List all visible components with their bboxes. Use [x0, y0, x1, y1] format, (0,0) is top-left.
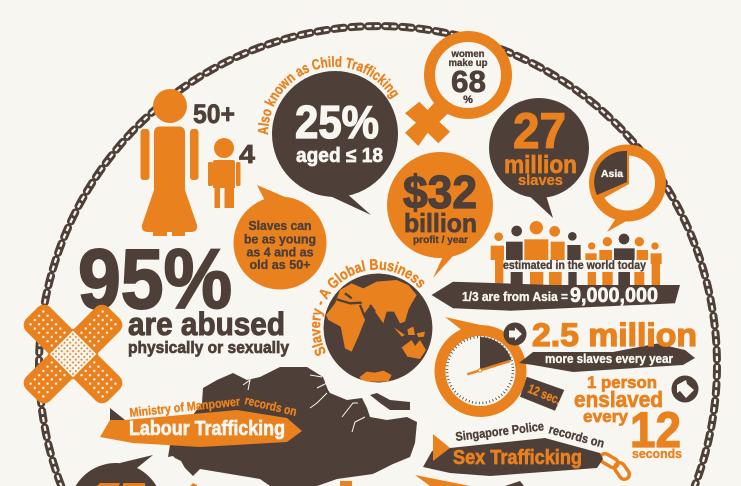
speech bubble: 25% aged 18 or under: aged ≤ 18: [296, 145, 383, 167]
speech bubble: 27 million slaves: slaves: [518, 172, 563, 189]
icon: up-left arrow circle: [672, 376, 698, 402]
ribbon: more slaves every year: more slaves every year: [545, 351, 673, 366]
ribbon: sex trafficking: [423, 419, 631, 481]
speech bubble: $32 billion profit: billion: [404, 208, 477, 238]
headline: 95% are abused: are abused: [128, 306, 285, 342]
icon: right arrow circle: [504, 322, 526, 346]
arc heading: slavery a global business: Slavery - A Global Business: [312, 259, 424, 356]
text block: one person enslaved every 12 seconds: 12: [630, 402, 681, 458]
ribbon: more slaves every year: 2.5 million: [532, 317, 697, 353]
ribbon: one third from Asia: 9,000,000: [570, 284, 658, 307]
text block: one person enslaved every 12 seconds: enslaved: [574, 387, 663, 412]
arc heading: also known as child trafficking: Also known as Child Trafficking: [258, 56, 398, 135]
icon: crossed bandage: [0, 272, 155, 436]
ribbon: labour trafficking: [100, 393, 302, 447]
text block: one person enslaved every 12 seconds: every: [583, 407, 629, 426]
speech bubble: 25% aged 18 or under: 25%: [295, 96, 379, 148]
speech bubble: $32 billion profit: profit / year: [413, 235, 468, 246]
speech bubble: slaves can be as young: [234, 185, 326, 290]
speech bubble: slaves can be as young: be as young: [244, 232, 316, 246]
speech bubble: slaves can be as young: old as 50+: [250, 257, 311, 272]
headline: 95% are abused: [78, 232, 289, 357]
text block: one person enslaved every 12 seconds: 1 person: [587, 373, 657, 392]
speech bubble: 27 million slaves: [489, 98, 589, 218]
ribbon: sex trafficking: Singapore Police: [455, 419, 545, 444]
ribbon tip: next section: [415, 475, 524, 486]
icon: child figure: [208, 138, 240, 208]
label: 4: 4: [239, 139, 256, 169]
caption: estimated in the world today: estimated in the world today: [503, 258, 646, 272]
pie bubble: Asia share: [594, 150, 660, 232]
speech bubble: $32 billion profit: [387, 152, 493, 278]
icon: female symbol with 68%: make up: [448, 58, 488, 69]
ribbon: one third from Asia: 1/3 are from Asia =: [462, 289, 568, 304]
ribbon: labour trafficking: Labour Trafficking: [129, 418, 285, 440]
speech bubble: slaves can be as young: as 4 and as: [246, 244, 314, 260]
icon: female symbol with 68%: 68: [451, 64, 486, 99]
ribbon: one third from Asia: [432, 282, 680, 311]
speech bubble: 25% aged 18 or under: [272, 71, 398, 215]
icon: clock with 12 second wedge: 12 sec.: [526, 381, 563, 408]
icon: adult figure: [140, 89, 198, 236]
icon: globe: [324, 274, 432, 382]
icon: female symbol with 68%: %: [463, 94, 473, 106]
ribbon: sex trafficking: Sex Trafficking: [453, 447, 582, 469]
speech bubble: 27 million slaves: 27: [513, 103, 566, 159]
icon: clock with 12 second wedge: [440, 317, 564, 412]
speech bubble: bottom left statistic: [76, 455, 156, 486]
text block: one person enslaved every 12 seconds: seconds: [632, 446, 682, 461]
speech bubble: slaves can be as young: Slaves can: [248, 218, 312, 233]
pictogram row: crowd of people: [491, 221, 662, 285]
icon: female symbol with 68%: women: [451, 49, 484, 60]
speech bubble: 27 million slaves: million: [504, 151, 577, 179]
pie bubble: Asia share: Asia: [601, 169, 623, 180]
speech bubble: $32 billion profit: $32: [403, 166, 477, 218]
headline: 95% are abused: 95%: [78, 232, 232, 326]
ribbon: more slaves every year: [519, 317, 697, 372]
ribbon: labour trafficking: records on: [243, 393, 298, 419]
label: 50+: 50+: [193, 99, 235, 129]
headline: 95% are abused: physically or sexually: [128, 338, 289, 357]
text block: one person enslaved every 12 seconds: [574, 373, 682, 461]
ribbon: sex trafficking: records on: [547, 422, 606, 451]
ribbon: labour trafficking: Ministry of Manpower: [129, 394, 241, 420]
icon: female symbol with 68%: [405, 36, 506, 146]
map: Singapore: [168, 367, 417, 486]
